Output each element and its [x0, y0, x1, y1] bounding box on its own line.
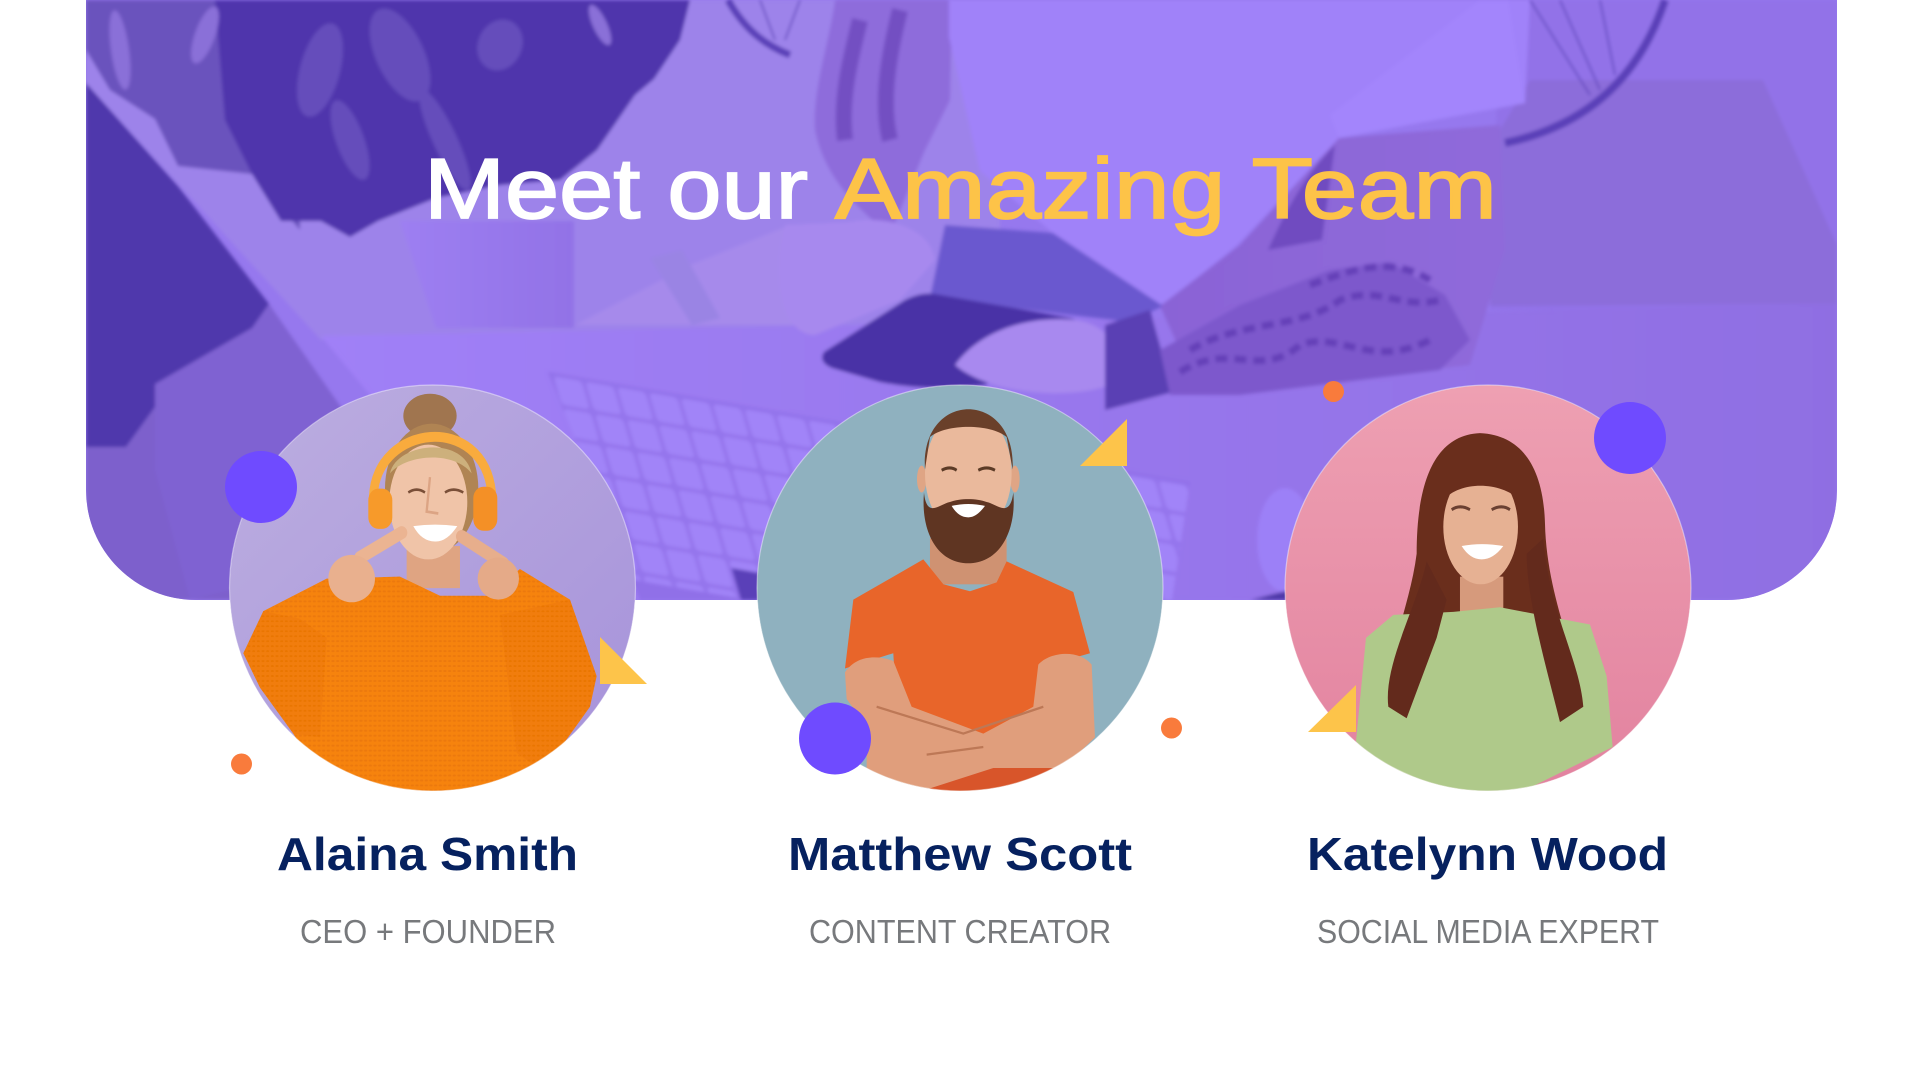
icon: keyboard: [550, 374, 1188, 600]
decoration: yellow triangle: [1080, 419, 1127, 466]
name: Alaina Smith: Alaina Smith: [277, 828, 578, 880]
decoration: purple circle: [225, 451, 297, 523]
role: SOCIAL MEDIA EXPERT: SOCIAL MEDIA EXPERT: [1317, 913, 1659, 950]
panel: team member Alaina Smith: [225, 385, 647, 950]
panel: team member Matthew Scott: [757, 385, 1182, 950]
decoration: orange dot: [231, 754, 252, 774]
role: CONTENT CREATOR: CONTENT CREATOR: [809, 913, 1111, 950]
title: [424, 142, 1497, 237]
name: Katelynn Wood: Katelynn Wood: [1307, 828, 1668, 880]
decoration: yellow triangle: [1308, 685, 1356, 732]
photo: Alaina Smith: [230, 385, 636, 802]
decoration: orange dot: [1323, 381, 1344, 402]
photo: Matthew Scott: [757, 385, 1163, 795]
icon: plant leaves: [86, 0, 300, 230]
decoration: orange dot: [1161, 718, 1182, 738]
title: Meet our: [424, 142, 808, 237]
title: Amazing Team: [835, 142, 1497, 237]
role: CEO + FOUNDER: CEO + FOUNDER: [300, 913, 556, 950]
name: Matthew Scott: Matthew Scott: [788, 828, 1132, 880]
photo: Katelynn Wood: [1285, 385, 1691, 802]
panel: team member Katelynn Wood: [1285, 381, 1691, 950]
decoration: purple circle: [1594, 402, 1666, 474]
decoration: yellow triangle: [600, 637, 647, 684]
decoration: purple circle: [799, 702, 871, 774]
panel: purple photo header: [86, 0, 1837, 600]
